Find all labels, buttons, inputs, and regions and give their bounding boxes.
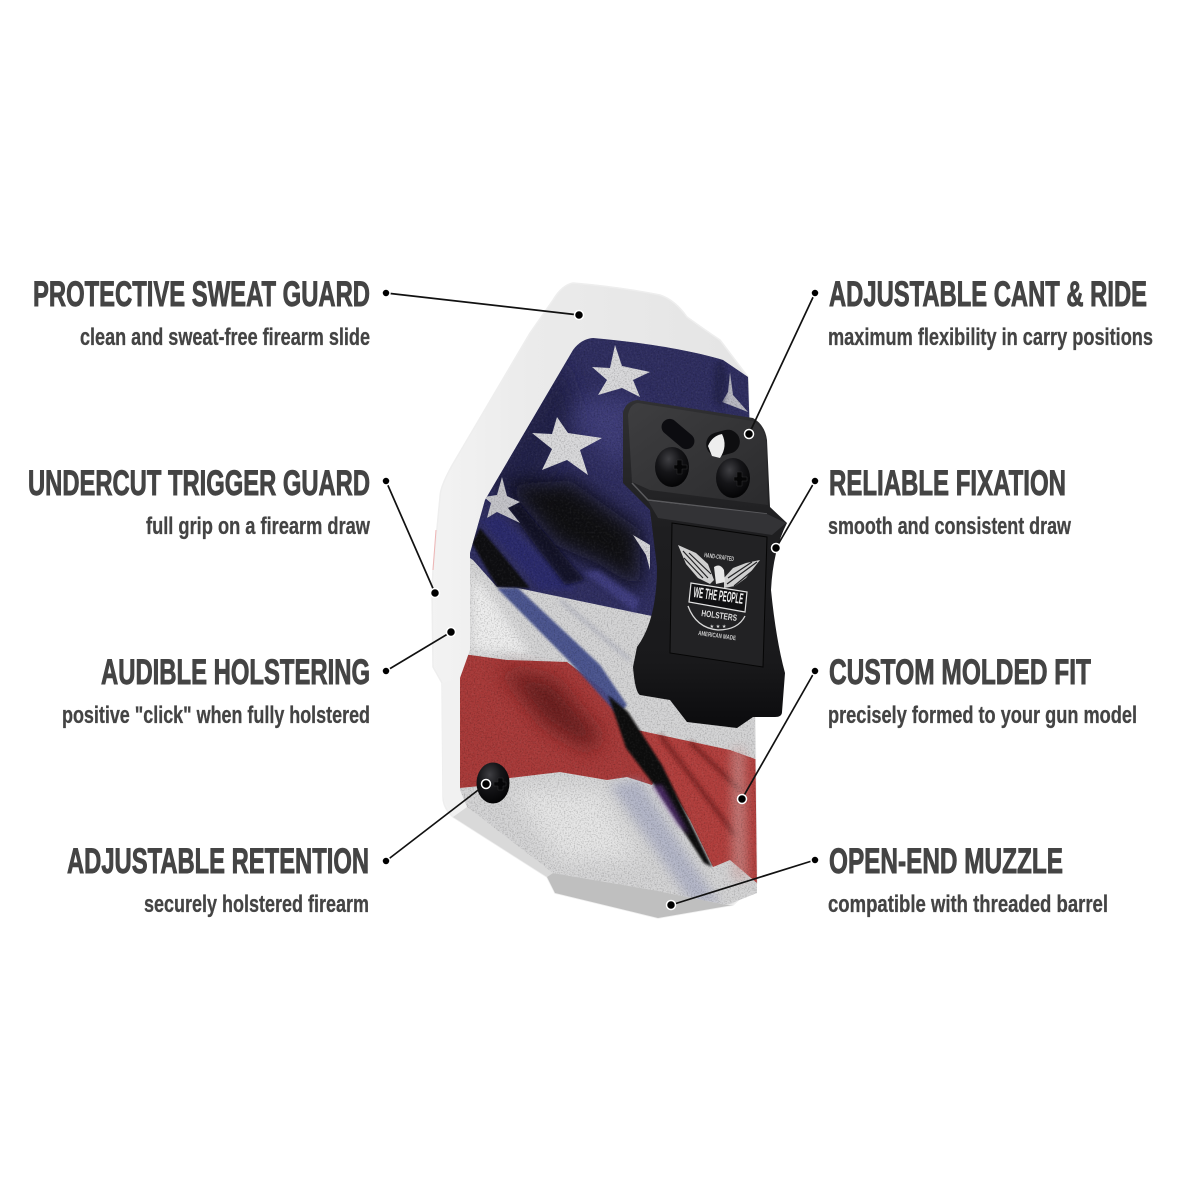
hole white glimpse <box>708 434 725 458</box>
logo banner <box>689 583 747 612</box>
canton dark stripe <box>505 505 585 585</box>
right wing feathers <box>727 562 757 586</box>
light leather grain <box>460 339 756 874</box>
belt clip <box>623 400 787 728</box>
leader line <box>776 481 815 548</box>
brand logo <box>678 545 760 642</box>
start dot <box>382 477 390 485</box>
callout: protective sweat guard <box>33 275 584 351</box>
white band streak <box>560 600 630 660</box>
crest text: HAND-CRAFTED <box>704 552 735 563</box>
callout: adjustable cant and ride <box>744 275 1153 438</box>
right red dark lines <box>660 735 740 835</box>
holster outer shell <box>432 283 757 918</box>
callout: undercut trigger guard <box>28 464 440 598</box>
start dot <box>811 667 819 675</box>
shell red edge hint <box>433 530 436 570</box>
brand logo: WE THE PEOPLE <box>692 584 744 608</box>
star five <box>633 535 650 570</box>
screw left recess <box>674 460 687 474</box>
end dot <box>772 544 780 552</box>
right wing <box>724 560 760 588</box>
leader line <box>386 481 435 593</box>
heading: UNDERCUT TRIGGER GUARD <box>28 464 370 503</box>
american made text: AMERICAN MADE <box>698 630 737 642</box>
clip body <box>623 400 787 728</box>
callout: adjustable retention <box>67 780 490 918</box>
retention screw recess <box>494 778 506 790</box>
screw right <box>716 458 750 498</box>
leader line <box>742 671 815 799</box>
black diagonal streak <box>608 695 712 867</box>
start dot <box>382 857 390 865</box>
end dot <box>574 310 584 320</box>
clip inner panel <box>670 523 767 667</box>
start dot <box>811 477 819 485</box>
left wing <box>678 545 714 584</box>
flag white base <box>460 558 757 905</box>
callout: reliable fixation <box>772 464 1071 552</box>
star three <box>484 477 520 523</box>
start dot <box>811 289 819 297</box>
leader line <box>749 293 815 434</box>
canton dark diagonal <box>472 528 530 588</box>
start dot <box>811 856 819 864</box>
start dot <box>382 289 390 297</box>
description: smooth and consistent draw <box>828 513 1071 540</box>
shell lower band <box>453 807 553 877</box>
logo shield ring <box>688 606 745 630</box>
panel: holster product illustration <box>432 283 787 920</box>
top notch shade <box>712 360 728 410</box>
shell lower left edge <box>442 678 500 840</box>
canton black fold <box>505 480 640 590</box>
leader line <box>671 860 815 905</box>
leader line <box>386 632 451 671</box>
end dot <box>482 780 490 788</box>
blue diagonal streak <box>497 588 627 715</box>
heading: PROTECTIVE SWEAT GUARD <box>33 275 370 314</box>
clip shoulder <box>648 501 786 535</box>
end dot <box>744 430 754 438</box>
lower white highlight <box>520 789 632 861</box>
description: full grip on a firearm draw <box>146 513 370 540</box>
red stripe right <box>638 730 757 883</box>
purple brush streak <box>652 785 690 835</box>
description: clean and sweat-free firearm slide <box>80 324 370 351</box>
callout: open-end muzzle <box>666 842 1108 918</box>
heading: RELIABLE FIXATION <box>829 464 1066 503</box>
description: compatible with threaded barrel <box>828 891 1108 918</box>
callout: audible holstering <box>62 628 456 729</box>
heading: AUDIBLE HOLSTERING <box>101 653 370 692</box>
canton diagonal purple band <box>484 517 568 594</box>
white band left highlight <box>472 575 530 655</box>
red stripe left <box>460 654 654 788</box>
star two <box>532 417 602 475</box>
end dot <box>738 794 746 804</box>
printed flag wrap <box>460 338 757 905</box>
description: securely holstered firearm <box>144 891 369 918</box>
star four <box>722 372 748 412</box>
heading: CUSTOM MOLDED FIT <box>829 653 1091 692</box>
description: positive "click" when fully holstered <box>62 702 370 729</box>
canton bright streak <box>583 570 640 612</box>
canton left shade <box>487 366 578 498</box>
star one <box>592 345 650 397</box>
leader line <box>386 293 579 315</box>
heading: OPEN-END MUZZLE <box>829 842 1063 881</box>
leader line <box>386 784 486 861</box>
clip fold highlight <box>632 483 767 514</box>
screw right recess <box>734 472 747 486</box>
infographic canvas <box>29 280 1152 918</box>
retention screw <box>476 762 510 804</box>
round slot hole <box>703 427 743 459</box>
canton highlight <box>564 394 634 463</box>
end dot <box>666 900 676 910</box>
holsters text: HOLSTERS <box>701 608 738 623</box>
eagle head <box>714 566 725 584</box>
flag blue canton <box>470 338 750 616</box>
left wing feathers <box>683 551 711 578</box>
dark leather grain <box>460 338 757 904</box>
right fold pale strip <box>731 748 748 880</box>
start dot <box>382 667 390 675</box>
screw left <box>655 447 689 487</box>
slot hole <box>658 416 698 452</box>
blue grey brush <box>610 780 720 905</box>
logo stars: ★ ★ ★ <box>710 624 727 630</box>
red fold shadow <box>500 668 600 752</box>
end dot <box>430 588 440 598</box>
callout: custom molded fit <box>738 653 1137 804</box>
clip upper plate <box>628 403 768 505</box>
muzzle grey lip <box>547 873 733 918</box>
end dot <box>446 628 456 636</box>
heading: ADJUSTABLE RETENTION <box>67 842 369 881</box>
